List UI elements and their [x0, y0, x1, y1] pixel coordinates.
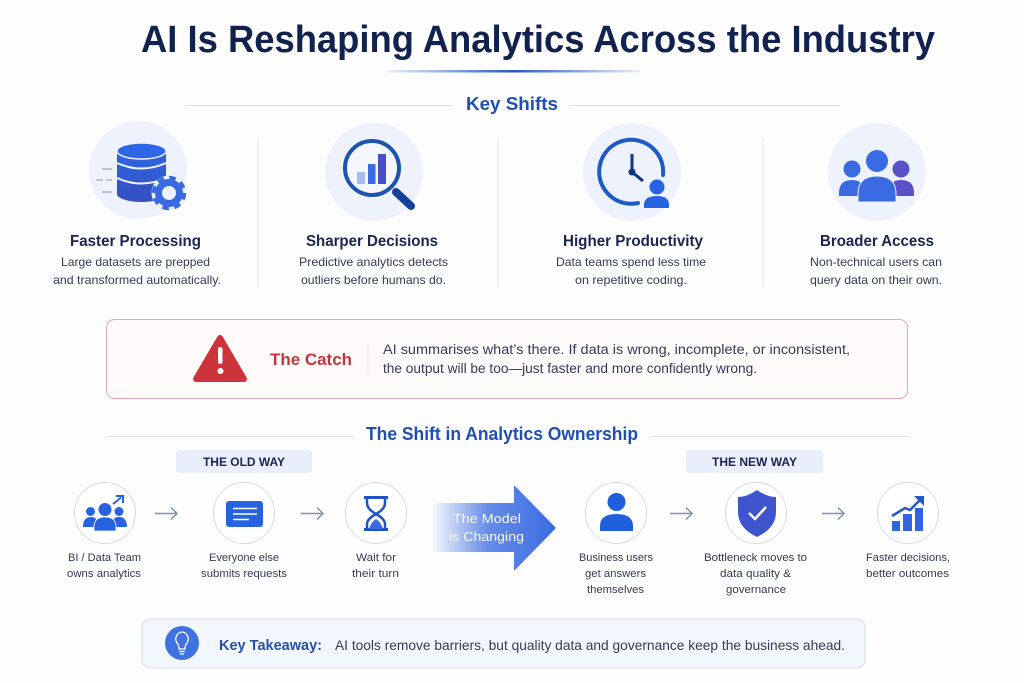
catch text: the output will be too—just faster and more confidently wrong. — [383, 361, 757, 376]
label: get answers — [585, 568, 647, 580]
label: Business users — [579, 552, 653, 564]
description: Non-technical users can — [810, 255, 942, 269]
callout: the catch — [106, 320, 908, 398]
icon: hourglass — [364, 498, 388, 530]
step: bottleneck moves to data quality and governance — [704, 482, 807, 596]
description: on repetitive coding. — [575, 273, 687, 287]
icon: rising bar chart — [892, 496, 924, 531]
step: business users get answers themselves — [579, 482, 653, 596]
description: Predictive analytics detects — [299, 255, 448, 269]
callout: key takeaway — [142, 619, 865, 668]
label: their turn — [352, 568, 399, 580]
arrow: the model is changing: is Changing — [449, 529, 524, 544]
icon: three people — [828, 123, 926, 221]
description — [299, 255, 448, 287]
heading: Higher Productivity — [563, 233, 703, 250]
description: and transformed automatically. — [53, 273, 221, 287]
arrow — [301, 508, 323, 520]
tag: the new way — [686, 450, 823, 473]
label — [67, 552, 142, 580]
heading: Faster Processing — [70, 233, 201, 250]
panel: sharper decisions — [299, 123, 448, 287]
description: outliers before humans do. — [301, 273, 446, 287]
catch text: AI summarises what’s there. If data is wrong, incomplete, or inconsistent, — [383, 342, 850, 357]
arrow: the model is changing — [433, 485, 556, 571]
heading: key shifts: Key Shifts — [466, 94, 558, 114]
label: governance — [726, 584, 786, 596]
tag: the old way — [176, 450, 312, 473]
description — [810, 255, 942, 287]
arrow: the model is changing: The Model — [453, 511, 521, 526]
label — [866, 552, 950, 580]
description: Data teams spend less time — [556, 255, 706, 269]
step: everyone else submits requests — [201, 482, 288, 580]
panel: broader access — [810, 123, 942, 287]
catch label: The Catch — [270, 350, 352, 369]
label: Bottleneck moves to — [704, 552, 807, 564]
tag: the new way: THE NEW WAY — [712, 455, 797, 469]
heading: shift in analytics ownership: The Shift in Analytics Ownership — [366, 424, 638, 444]
label: themselves — [587, 584, 645, 596]
icon: shield check — [738, 490, 776, 537]
description — [53, 255, 221, 287]
description: query data on their own. — [810, 273, 942, 287]
label: owns analytics — [67, 568, 142, 580]
icon: message card — [226, 501, 263, 527]
description: Large datasets are prepped — [61, 255, 210, 269]
label — [201, 552, 288, 580]
heading: Broader Access — [820, 233, 934, 250]
icon: database with gear — [89, 121, 187, 219]
label — [579, 552, 653, 596]
label: BI / Data Team — [68, 552, 141, 564]
label: data quality & — [720, 568, 792, 580]
step: BI / data team owns analytics — [67, 482, 142, 580]
label: submits requests — [201, 568, 288, 580]
label: Wait for — [356, 552, 396, 564]
panel: faster processing — [53, 121, 221, 287]
tag: the old way: THE OLD WAY — [203, 455, 285, 469]
icon: person — [600, 493, 633, 531]
description — [556, 255, 706, 287]
icon: light bulb — [165, 626, 199, 660]
arrow — [670, 508, 692, 520]
step: faster decisions better outcomes — [866, 482, 950, 580]
icon: team with arrow — [83, 496, 127, 531]
takeaway label: Key Takeaway: — [219, 638, 322, 654]
icon: clock with person — [583, 123, 681, 221]
icon: warning triangle — [196, 338, 244, 379]
icon: magnifier with bars — [325, 123, 423, 221]
step: wait for their turn — [346, 482, 406, 580]
arrow — [155, 508, 177, 520]
panel: higher productivity — [556, 123, 706, 287]
arrow — [822, 508, 844, 520]
label: Everyone else — [209, 552, 279, 564]
takeaway text: AI tools remove barriers, but quality data and governance keep the business ahead. — [335, 637, 845, 653]
label — [352, 552, 399, 580]
label — [704, 552, 807, 596]
catch text — [383, 342, 850, 376]
label: Faster decisions, — [866, 552, 950, 564]
label: better outcomes — [866, 568, 950, 580]
title: AI Is Reshaping Analytics Across the Industry — [141, 19, 935, 61]
heading: Sharper Decisions — [306, 233, 438, 250]
